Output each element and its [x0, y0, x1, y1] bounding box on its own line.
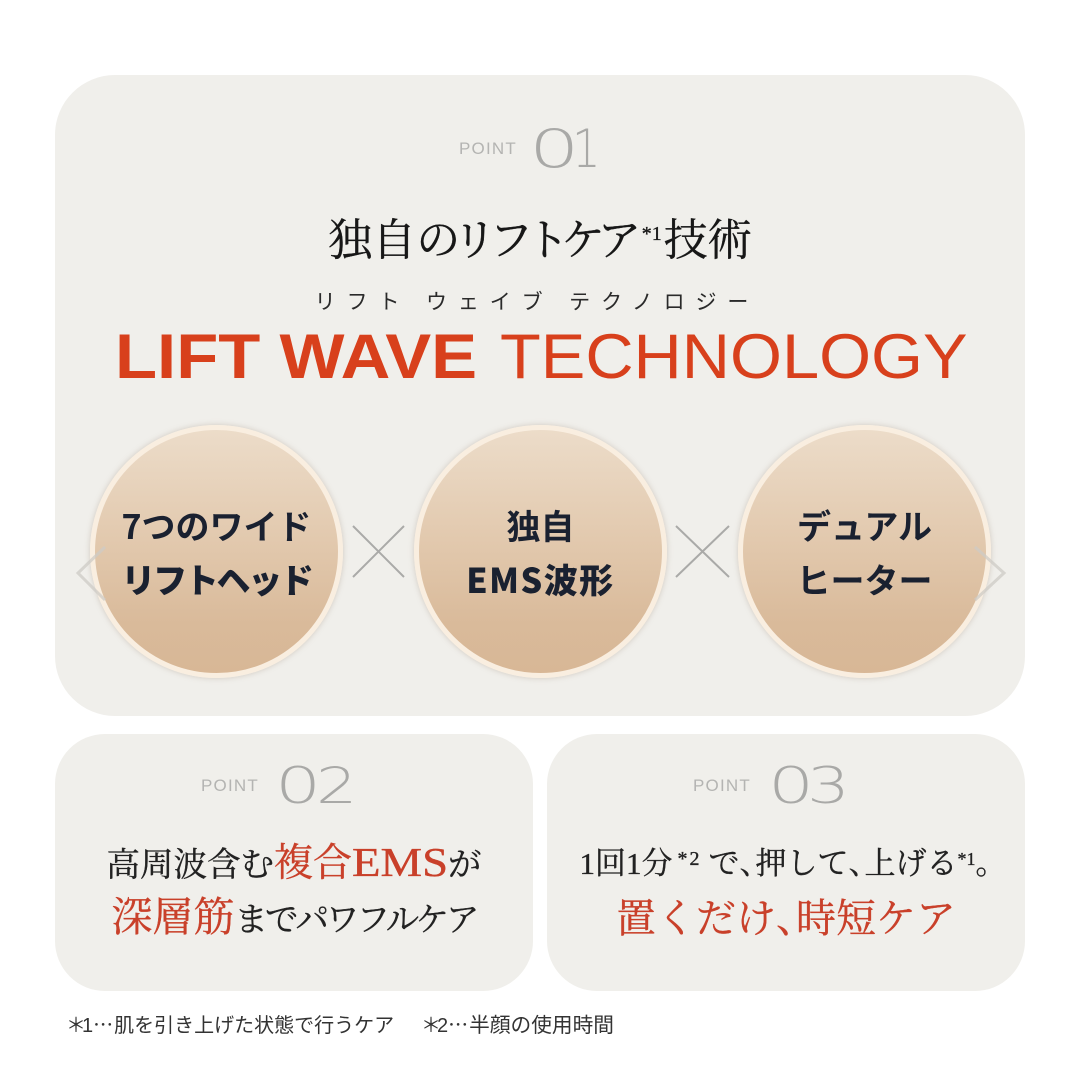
- heading: proprietary lift care: 独自のリフトケア *1技術: [328, 216, 752, 265]
- circle: wide lift head: 7つのワイド: [121, 500, 312, 549]
- panel: point 01: [55, 75, 1025, 716]
- panel: point 03: [547, 734, 1025, 991]
- point 02 number: 2: [316, 757, 357, 815]
- point 01 number: 1: [572, 119, 601, 180]
- point 03 label: POINT: [693, 776, 751, 795]
- katakana reading: リフト ウェイブ テクノロジー: [315, 286, 759, 316]
- point 03 text: [580, 846, 992, 941]
- footnote: [66, 1009, 614, 1038]
- circle: wide lift head: [90, 425, 343, 678]
- point 03 number: 0: [768, 757, 814, 815]
- point 02 number: 0: [275, 757, 321, 815]
- point 02 number: [275, 757, 357, 815]
- circle: EMS waveform: EMS波形: [466, 554, 615, 603]
- point 02 text: [106, 839, 482, 940]
- point 02 text: 高周波含む複合 が: [106, 842, 482, 885]
- heading: lift wave technology: [115, 322, 968, 392]
- footnote: ＊2…半顔の使用時間: [421, 1009, 614, 1038]
- point 02 text: EMS: [352, 839, 448, 885]
- heading: lift wave technology: LIFT WAVE: [115, 322, 477, 392]
- point 02 label: POINT: [201, 776, 259, 795]
- icon: multiply signs and carousel arrows: [76, 525, 1006, 601]
- circle: dual heater: [738, 425, 991, 678]
- point 03 text: 1回1分*2で、押して、上げる*1。: [580, 846, 992, 881]
- circle: dual heater: デュアル: [797, 500, 932, 549]
- circle: dual heater: ヒーター: [796, 554, 932, 603]
- point 03 number: [768, 757, 850, 815]
- circle: wide lift head: リフトヘッド: [121, 554, 312, 603]
- point 03 text: 置くだけ、時短ケア: [616, 896, 956, 941]
- footnote: ＊1…肌を引き上げた状態で行うケア: [66, 1009, 394, 1038]
- point 02 text: 深層筋までパワフルケア: [112, 894, 476, 940]
- circle: EMS waveform: [414, 425, 667, 678]
- point 01 number: 0: [529, 119, 580, 180]
- circle: EMS waveform: 独自: [506, 500, 574, 549]
- point 03 number: 3: [807, 757, 850, 815]
- point 01 label: POINT: [459, 139, 517, 158]
- heading: lift wave technology: TECHNOLOGY: [500, 322, 968, 392]
- panel: point 02: [55, 734, 533, 991]
